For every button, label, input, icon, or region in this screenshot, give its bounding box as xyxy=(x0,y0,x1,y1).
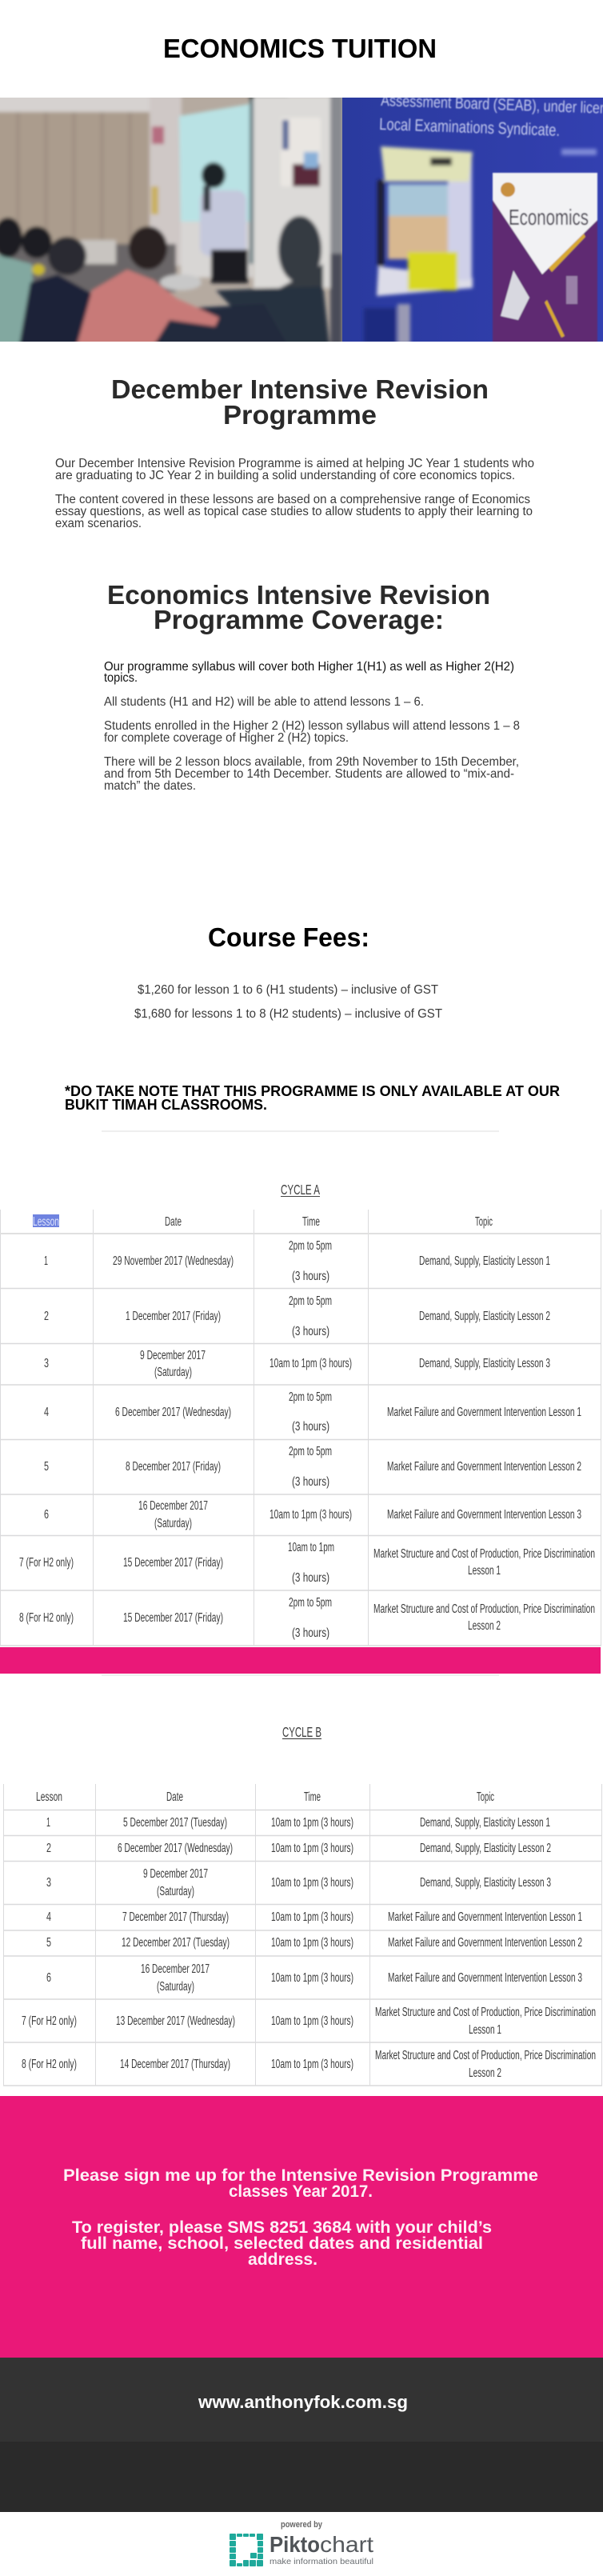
row 8: Lesson 2 xyxy=(468,1619,501,1633)
heading: cycle B: CYCLE B xyxy=(282,1724,321,1740)
heading: cycle A: CYCLE A xyxy=(281,1182,320,1198)
Piktochart attribution: make information beautiful xyxy=(270,2557,373,2566)
row 8 xyxy=(22,2049,596,2080)
row 6: 16 December 2017 xyxy=(141,1962,210,1976)
Piktochart attribution xyxy=(230,2520,373,2566)
row 2: 1 December 2017 (Friday) xyxy=(126,1310,221,1323)
registration instructions xyxy=(72,2218,492,2269)
heading: programme coverage: Economics Intensive Revision xyxy=(107,580,490,610)
text block: coverage details: topics. xyxy=(104,671,138,685)
heading: December Intensive Revision Programme xyxy=(111,374,489,430)
text block: coverage details: Our programme syllabus will cover both Higher 1(H1) as well as Higher 2(H2) xyxy=(104,660,514,674)
row 3: 3 xyxy=(46,1876,51,1890)
sign-up text xyxy=(63,2166,538,2201)
row 8: 14 December 2017 (Thursday) xyxy=(120,2058,230,2071)
row 7: Lesson 1 xyxy=(469,2023,501,2037)
row 7: Lesson 1 xyxy=(468,1564,501,1578)
heading: programme coverage: Programme Coverage: xyxy=(154,605,444,634)
registration instructions: To register, please SMS 8251 3684 with your child’s xyxy=(72,2218,492,2237)
row 1: 2pm to 5pm xyxy=(289,1239,332,1253)
callout: location note: BUKIT TIMAH CLASSROOMS. xyxy=(65,1097,267,1113)
row 7: 10am to 1pm (3 hours) xyxy=(271,2014,353,2028)
text block: programme introduction: exam scenarios. xyxy=(55,517,142,530)
row 8 xyxy=(19,1596,595,1640)
text block: fee amounts xyxy=(134,983,442,1021)
text block: programme introduction: are graduating to JC Year 2 in building a solid understanding of core economics topics. xyxy=(55,469,515,482)
text block: coverage details: Students enrolled in the Higher 2 (H2) lesson syllabus will attend lessons 1 – 8 xyxy=(104,719,520,733)
sign-up text: classes Year 2017. xyxy=(229,2182,373,2201)
registration instructions: full name, school, selected dates and residential xyxy=(81,2234,483,2253)
text block: programme introduction: essay questions, as well as topical case studies to allow students to apply their learning to xyxy=(55,505,533,518)
row 6 xyxy=(44,1499,581,1530)
row 8: 8 (For H2 only) xyxy=(22,2058,77,2071)
row 4: 4 xyxy=(44,1406,49,1419)
row 7 xyxy=(22,2006,596,2037)
Piktochart attribution: chart xyxy=(320,2532,373,2557)
row 2 xyxy=(44,1294,550,1338)
Piktochart attribution: powered by xyxy=(281,2520,323,2530)
row 5 xyxy=(44,1445,581,1489)
panel: sign-up call to action xyxy=(0,2096,603,2358)
row 6: 16 December 2017 xyxy=(138,1499,208,1513)
row 6: 10am to 1pm (3 hours) xyxy=(271,1971,353,1985)
row 7: 13 December 2017 (Wednesday) xyxy=(116,2014,235,2028)
row 3: 10am to 1pm (3 hours) xyxy=(270,1357,352,1370)
row 5: 5 xyxy=(44,1460,49,1474)
row 7 xyxy=(19,1541,595,1585)
row 1: 5 December 2017 (Tuesday) xyxy=(123,1816,227,1830)
table: cycle A schedule xyxy=(0,1210,601,1646)
row 8: 10am to 1pm (3 hours) xyxy=(271,2058,353,2071)
header row: Topic xyxy=(475,1215,493,1229)
photo: classroom with teacher and students: Local Examinations Syndicate. xyxy=(379,115,560,140)
row 2: 2 xyxy=(46,1842,51,1855)
row 3: 9 December 2017 xyxy=(140,1349,206,1362)
text block: coverage details: There will be 2 lesson blocs available, from 29th November to 15th December, xyxy=(104,755,519,769)
heading: December Intensive Revision Programme: December Intensive Revision xyxy=(111,374,489,404)
title: ECONOMICS TUITION xyxy=(163,34,437,63)
row 3 xyxy=(44,1349,550,1379)
row 5: 12 December 2017 (Tuesday) xyxy=(122,1936,230,1950)
header row: Date xyxy=(166,1790,183,1804)
row 6: (Saturday) xyxy=(154,1517,192,1530)
text block: coverage details: for complete coverage of Higher 2 (H2) topics. xyxy=(104,731,349,745)
text block: fee amounts: $1,260 for lesson 1 to 6 (H1 students) – inclusive of GST xyxy=(138,983,438,997)
row 7: 10am to 1pm xyxy=(288,1541,334,1554)
header row: Date xyxy=(165,1215,182,1229)
panel: website footer xyxy=(0,2358,603,2512)
header row: Lesson xyxy=(36,1790,62,1804)
row 4: (3 hours) xyxy=(292,1420,329,1434)
row 6: 6 xyxy=(44,1508,49,1522)
row 4: 10am to 1pm (3 hours) xyxy=(271,1910,353,1924)
row 6: 6 xyxy=(46,1971,51,1985)
row 5 xyxy=(46,1936,582,1950)
row 4: 7 December 2017 (Thursday) xyxy=(122,1910,229,1924)
row 8: 2pm to 5pm xyxy=(289,1596,332,1610)
row 1: 10am to 1pm (3 hours) xyxy=(271,1816,353,1830)
row 7: 7 (For H2 only) xyxy=(22,2014,77,2028)
heading: programme coverage xyxy=(107,580,490,634)
header row xyxy=(33,1214,493,1229)
icon: Piktochart logo xyxy=(230,2534,263,2566)
row 3: 9 December 2017 xyxy=(143,1867,208,1881)
row 5: 8 December 2017 (Friday) xyxy=(126,1460,221,1474)
heading: cycle B xyxy=(282,1724,321,1740)
row 7: (3 hours) xyxy=(292,1571,329,1585)
text block: programme introduction: The content covered in these lessons are based on a comprehensive range of Economics xyxy=(55,493,530,506)
callout: location note: *DO TAKE NOTE THAT THIS PROGRAMME IS ONLY AVAILABLE AT OUR xyxy=(65,1083,560,1099)
row 1: 1 xyxy=(46,1816,50,1830)
row 7: 15 December 2017 (Friday) xyxy=(123,1556,223,1570)
callout: location note xyxy=(65,1083,560,1113)
text block: programme introduction xyxy=(55,457,534,530)
row 3: (Saturday) xyxy=(154,1366,192,1379)
registration instructions: address. xyxy=(248,2250,317,2269)
row 1: 29 November 2017 (Wednesday) xyxy=(113,1254,234,1268)
text block: coverage details xyxy=(104,660,520,793)
row 3 xyxy=(46,1867,551,1898)
row 8: Lesson 2 xyxy=(469,2066,501,2080)
text block: coverage details: All students (H1 and H2) will be able to attend lessons 1 – 6. xyxy=(104,695,424,709)
pink band under cycle A xyxy=(0,1647,601,1674)
row 3: (Saturday) xyxy=(157,1885,194,1898)
row 1: (3 hours) xyxy=(292,1270,329,1283)
table: cycle B schedule xyxy=(3,1784,602,2086)
header row xyxy=(36,1790,494,1804)
row 2: 2 xyxy=(44,1310,49,1323)
row 2: 6 December 2017 (Wednesday) xyxy=(118,1842,233,1855)
row 5: 2pm to 5pm xyxy=(289,1445,332,1458)
header row: Time xyxy=(304,1790,321,1804)
row 2: 2pm to 5pm xyxy=(289,1294,332,1308)
row 4 xyxy=(46,1910,582,1924)
row 2: 10am to 1pm (3 hours) xyxy=(271,1842,353,1855)
header row: Lesson xyxy=(33,1215,59,1229)
photo: classroom with teacher and students xyxy=(0,92,603,346)
row 4: 4 xyxy=(46,1910,51,1924)
heading: cycle A xyxy=(281,1182,320,1198)
row 4 xyxy=(44,1390,581,1434)
heading: course fees: Course Fees: xyxy=(208,922,369,952)
heading: December Intensive Revision Programme: Programme xyxy=(223,400,377,430)
row 3: 10am to 1pm (3 hours) xyxy=(271,1876,353,1890)
row 1 xyxy=(46,1816,550,1830)
text block: coverage details: match” the dates. xyxy=(104,779,196,793)
header row: Time xyxy=(302,1215,320,1229)
website address: www.anthonyfok.com.sg xyxy=(198,2392,408,2412)
row 2: (3 hours) xyxy=(292,1325,329,1338)
row 4: 2pm to 5pm xyxy=(289,1390,332,1404)
text block: coverage details: and from 5th December to 14th December. Students are allowed to “mix-and- xyxy=(104,767,514,781)
sign-up text: Please sign me up for the Intensive Revision Programme xyxy=(63,2166,538,2185)
row 6: (Saturday) xyxy=(157,1980,194,1994)
row 4: 6 December 2017 (Wednesday) xyxy=(115,1406,231,1419)
row 6 xyxy=(46,1962,582,1994)
row 1 xyxy=(44,1239,550,1283)
row 3: 3 xyxy=(44,1357,49,1370)
row 5: 5 xyxy=(46,1936,51,1950)
Piktochart attribution: Pikto xyxy=(270,2532,320,2557)
row 5: 10am to 1pm (3 hours) xyxy=(271,1936,353,1950)
text block: programme introduction: Our December Intensive Revision Programme is aimed at helping JC Year 1 students who xyxy=(55,457,534,470)
row 8: 15 December 2017 (Friday) xyxy=(123,1611,223,1625)
row 8: 8 (For H2 only) xyxy=(19,1611,74,1625)
row 5: (3 hours) xyxy=(292,1475,329,1489)
row 8: (3 hours) xyxy=(292,1626,329,1640)
row 6: 10am to 1pm (3 hours) xyxy=(270,1508,352,1522)
row 1: 1 xyxy=(44,1254,48,1268)
row 7: 7 (For H2 only) xyxy=(19,1556,74,1570)
header row: Topic xyxy=(477,1790,494,1804)
row 2 xyxy=(46,1842,551,1855)
text block: fee amounts: $1,680 for lessons 1 to 8 (H2 students) – inclusive of GST xyxy=(134,1007,442,1021)
